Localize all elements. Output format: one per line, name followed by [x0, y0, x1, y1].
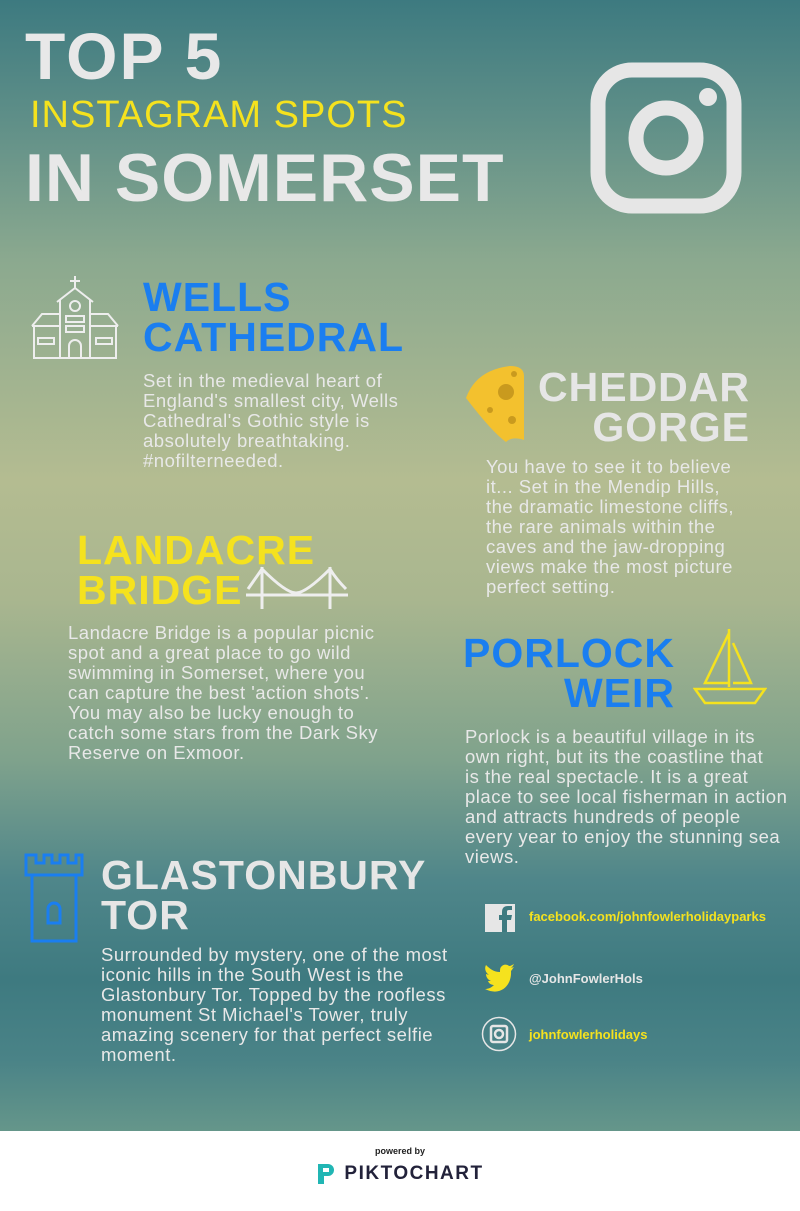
text: landacre: Reserve on Exmoor.	[68, 742, 245, 763]
text: wells	[143, 370, 398, 471]
text: glastonbury: moment.	[101, 1044, 176, 1065]
heading: porlock weir	[463, 630, 675, 716]
text: landacre: You may also be lucky enough to	[68, 702, 354, 723]
title: IN SOMERSET	[25, 140, 504, 216]
text: cheddar: the rare animals within the	[486, 516, 715, 537]
footer: powered by piktochart	[318, 1146, 484, 1184]
title: INSTAGRAM SPOTS	[30, 94, 407, 136]
heading: glastonbury tor: GLASTONBURY	[101, 852, 426, 898]
text: landacre	[68, 622, 378, 763]
text: porlock: every year to enjoy the stunning sea	[465, 826, 780, 847]
social: twitter: @JohnFowlerHols	[529, 971, 643, 986]
text: porlock: is the real spectacle. It is a great	[465, 766, 748, 787]
text: glastonbury: monument St Michael's Tower, truly	[101, 1004, 408, 1025]
text: glastonbury: iconic hills in the South West is the	[101, 964, 404, 985]
social: instagram	[482, 1016, 647, 1052]
text: cheddar: perfect setting.	[486, 576, 615, 597]
text: landacre: catch some stars from the Dark Sky	[68, 722, 378, 743]
text: porlock: and attracts hundreds of people	[465, 806, 741, 827]
text: landacre: can capture the best 'action shots'.	[68, 682, 370, 703]
heading: porlock weir: PORLOCK	[463, 630, 675, 676]
text: porlock: Porlock is a beautiful village in its	[465, 726, 755, 747]
text: cheddar: the dramatic limestone cliffs,	[486, 496, 734, 517]
text: porlock: views.	[465, 846, 519, 867]
text: glastonbury: Glastonbury Tor. Topped by the roofless	[101, 984, 446, 1005]
text: glastonbury	[101, 944, 448, 1065]
heading: cheddar gorge: GORGE	[592, 404, 750, 450]
text: wells: Set in the medieval heart of	[143, 370, 382, 391]
text: cheddar: views make the most picture	[486, 556, 733, 577]
heading: cheddar gorge	[538, 364, 750, 450]
text: glastonbury: amazing scenery for that perfect selfie	[101, 1024, 433, 1045]
heading: wells cathedral: CATHEDRAL	[143, 314, 404, 360]
text: porlock: own right, but its the coastline that	[465, 746, 763, 767]
text: cheddar: caves and the jaw-dropping	[486, 536, 725, 557]
social: twitter	[485, 964, 643, 992]
text: wells: England's smallest city, Wells	[143, 390, 398, 411]
icon: instagram logo	[590, 62, 742, 214]
heading: glastonbury tor	[101, 852, 426, 938]
icon: cathedral	[31, 276, 119, 359]
heading: landacre bridge: BRIDGE	[77, 567, 242, 613]
footer: powered by piktochart: powered by	[375, 1146, 425, 1156]
heading: landacre bridge	[77, 527, 315, 613]
text: landacre: spot and a great place to go wild	[68, 642, 351, 663]
heading: porlock weir: WEIR	[564, 670, 675, 716]
text: wells: Cathedral's Gothic style is	[143, 410, 370, 431]
heading: cheddar gorge: CHEDDAR	[538, 364, 750, 410]
heading: landacre bridge: LANDACRE	[77, 527, 315, 573]
title: TOP 5	[25, 19, 223, 93]
heading: wells cathedral: WELLS	[143, 274, 291, 320]
title	[25, 19, 504, 216]
text: glastonbury: Surrounded by mystery, one of the most	[101, 944, 448, 965]
heading: wells cathedral	[143, 274, 404, 360]
text: wells: #nofilterneeded.	[143, 450, 284, 471]
text: wells: absolutely breathtaking.	[143, 430, 350, 451]
text: porlock	[465, 726, 787, 867]
social: facebook: facebook.com/johnfowlerholidayparks	[529, 909, 766, 924]
text: landacre: Landacre Bridge is a popular picnic	[68, 622, 374, 643]
icon: cheese	[466, 366, 524, 442]
social: facebook	[485, 904, 766, 932]
icon: sailboat	[693, 629, 767, 704]
text: landacre: swimming in Somerset, where you	[68, 662, 365, 683]
icon: tower	[24, 854, 84, 942]
heading: glastonbury tor: TOR	[101, 892, 190, 938]
text: cheddar: You have to see it to believe	[486, 456, 731, 477]
text: cheddar: it... Set in the Mendip Hills,	[486, 476, 720, 497]
icon: bridge	[246, 566, 348, 609]
text: cheddar	[486, 456, 734, 597]
footer: powered by piktochart: PIKTOCHART	[344, 1163, 484, 1184]
text: porlock: place to see local fisherman in action	[465, 786, 787, 807]
social: instagram: johnfowlerholidays	[529, 1027, 647, 1042]
